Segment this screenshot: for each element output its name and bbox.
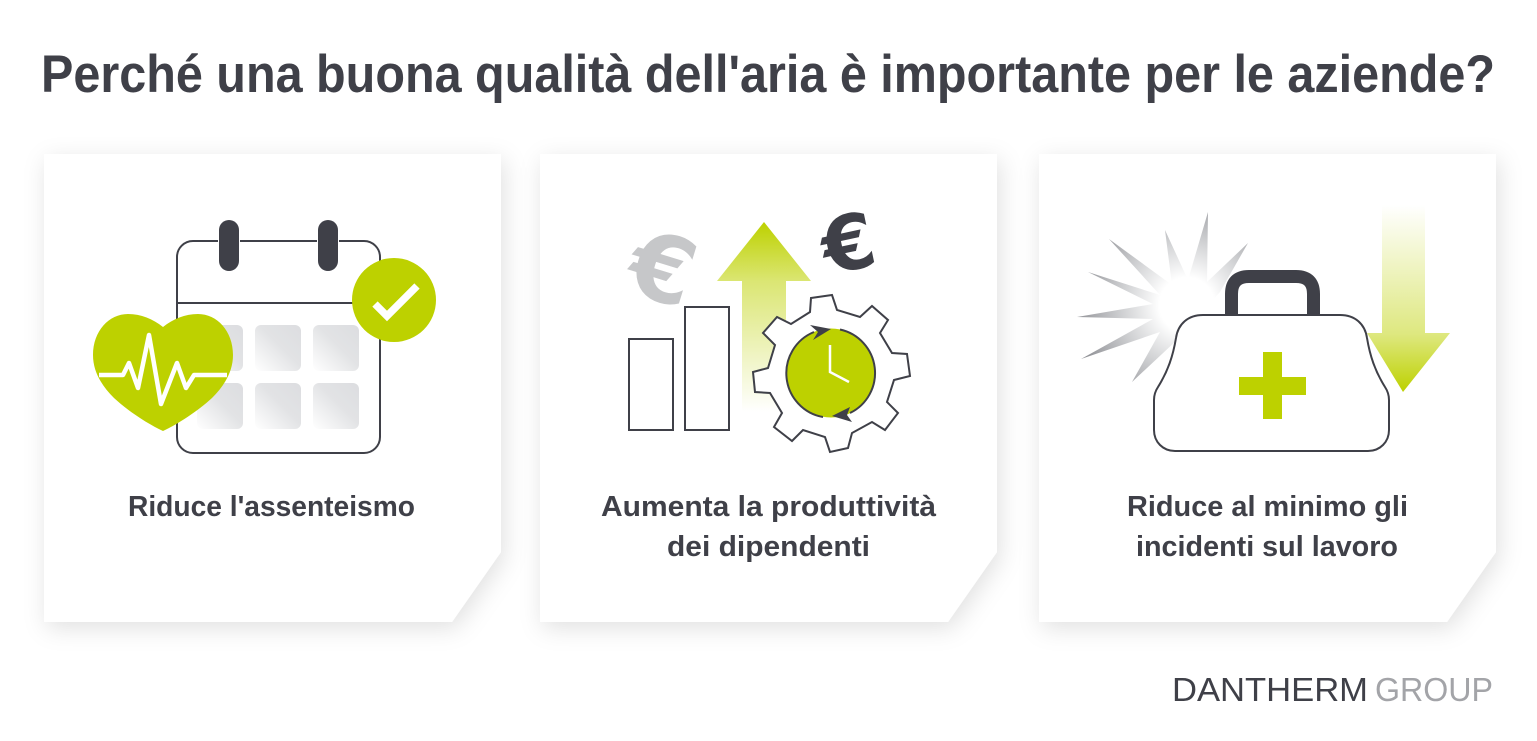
icon: medical bag xyxy=(1154,276,1389,451)
icon: gear with clock xyxy=(753,295,910,452)
label: dei dipendenti xyxy=(667,531,870,563)
logo xyxy=(1172,671,1493,708)
icon: check badge xyxy=(352,258,436,342)
logo: GROUP xyxy=(1375,671,1493,708)
panel: aumenta la produttività xyxy=(540,154,997,622)
icon: dark euro: € xyxy=(811,194,883,293)
icon: grey euro: € xyxy=(614,208,709,330)
card background xyxy=(540,154,997,622)
bar chart xyxy=(629,307,729,430)
icon: burst xyxy=(1077,212,1248,382)
label: Riduce al minimo gli xyxy=(1127,491,1408,523)
card background xyxy=(1039,154,1496,622)
label: incidenti sul lavoro xyxy=(1136,531,1398,563)
panel: riduce gli incidenti xyxy=(1039,154,1496,622)
icon: up arrow xyxy=(717,222,811,412)
label xyxy=(601,491,937,563)
icon: heart with pulse xyxy=(93,314,233,431)
icon: down arrow xyxy=(1367,205,1450,392)
label xyxy=(1127,491,1408,563)
logo: DANTHERM xyxy=(1172,671,1368,708)
label: Riduce l'assenteismo xyxy=(128,491,415,523)
card background xyxy=(44,154,501,622)
panel: riduce l'assenteismo xyxy=(44,154,501,622)
icon: calendar xyxy=(177,220,380,453)
label: Aumenta la produttività xyxy=(601,491,937,523)
